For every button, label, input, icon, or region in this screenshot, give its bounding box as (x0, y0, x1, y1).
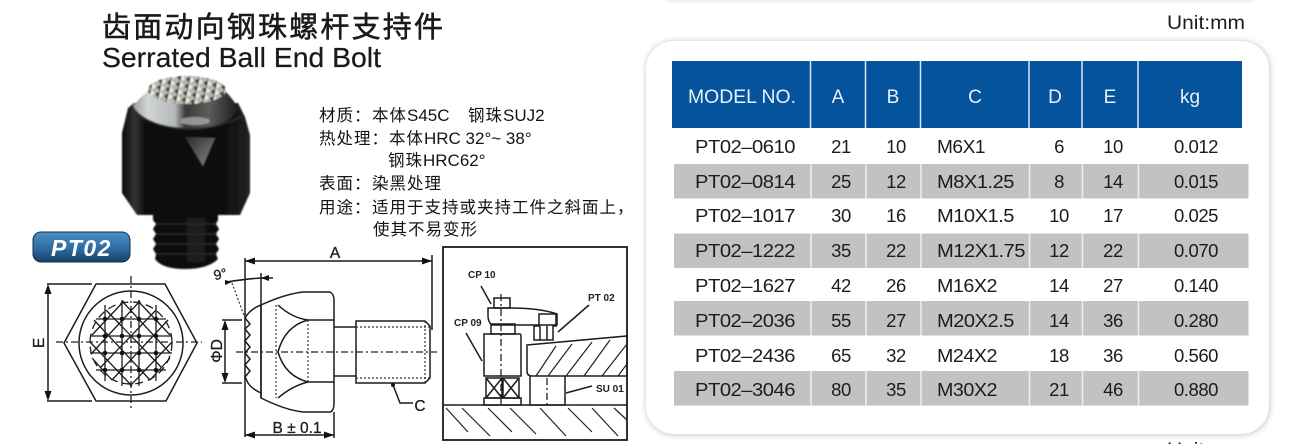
table row: PT02-1017: 30 (831, 205, 851, 226)
table row: PT02-2036: 0.280 (1174, 310, 1218, 331)
diagram: hexagon end view (31, 276, 202, 410)
table row: PT02-1222: M12X1.75 (937, 240, 1025, 261)
table row: PT02-3046: 46 (1103, 379, 1123, 400)
table row: PT02-1017: 10 (1049, 205, 1069, 226)
table row: PT02-1222: 35 (831, 240, 851, 261)
table row: PT02-2436: 32 (886, 345, 906, 366)
table row: PT02-0610: 6 (1054, 136, 1064, 157)
callout: CP 09 (454, 318, 482, 361)
table row: PT02-3046: PT02–3046 (695, 379, 795, 400)
table row: PT02-1627: 42 (831, 275, 851, 296)
text block: specifications: SUJ2 (503, 106, 545, 125)
text block: specifications: 表面： (319, 175, 372, 193)
table row: PT02-0814: 25 (831, 171, 851, 192)
text block: specifications (319, 106, 634, 239)
dimension: C (391, 383, 426, 415)
table row: PT02-3046: M30X2 (937, 379, 997, 400)
dimension: phi D (209, 320, 242, 383)
table row: PT02-1627: 0.140 (1174, 275, 1218, 296)
text block: specifications: 钢珠HRC62° (388, 151, 486, 170)
text block: specifications: 材质： (319, 107, 372, 125)
table row: PT02-0610: M6X1 (937, 136, 985, 157)
previous panel edge at top (660, 0, 1260, 1)
badge: PT02: PT02 (51, 235, 112, 261)
table row: PT02-2036: 55 (831, 310, 851, 331)
callout: SU 01 (566, 384, 624, 395)
table row: PT02-3046: 21 (1049, 379, 1069, 400)
table header: B (887, 87, 899, 108)
dimension: B: B ± 0.1 (272, 420, 322, 437)
table row: PT02-3046 (695, 379, 1218, 400)
table row: PT02-1017: M10X1.5 (937, 205, 1014, 226)
callout: SU 01: SU 01 (596, 384, 624, 395)
table row: PT02-2436: PT02–2436 (695, 345, 795, 366)
table row: PT02-0610: PT02–0610 (695, 136, 795, 157)
table row: PT02-0814: M8X1.25 (937, 171, 1014, 192)
table row: PT02-1627: PT02–1627 (695, 275, 795, 296)
callout: PT 02 (558, 293, 615, 332)
table row: PT02-1222: 22 (1103, 240, 1123, 261)
text block: specifications: 本体 (389, 129, 424, 148)
table row: PT02-1222: 22 (886, 240, 906, 261)
table row: PT02-1627: 27 (1103, 275, 1123, 296)
table row: PT02-0814: PT02–0814 (695, 171, 795, 192)
table row: PT02-1627: 14 (1049, 275, 1069, 296)
table row: PT02-0610: 21 (831, 136, 851, 157)
table row: PT02-1222 (695, 240, 1218, 261)
table row: PT02-0610: 0.012 (1174, 136, 1218, 157)
label: E: E (31, 338, 48, 348)
dimension: A: A (330, 245, 341, 262)
table row: PT02-0610 (695, 136, 1218, 157)
table row: PT02-2036: 27 (886, 310, 906, 331)
dimension: phi D: ΦD (209, 339, 226, 363)
table row: PT02-2436: 65 (831, 345, 851, 366)
table row: PT02-0610: 10 (1103, 136, 1123, 157)
icon: serrated grid (90, 300, 172, 386)
table row: PT02-2036: M20X2.5 (937, 310, 1014, 331)
table row: PT02-3046: 0.880 (1174, 379, 1218, 400)
callout: CP 10: CP 10 (468, 270, 496, 281)
table row: PT02-1222: PT02–1222 (695, 240, 795, 261)
table row: PT02-0814: 12 (886, 171, 906, 192)
table row: PT02-0814: 14 (1103, 171, 1123, 192)
table header (672, 61, 1242, 128)
icon: product photo of bolt (122, 76, 250, 269)
table header: MODEL NO. (688, 87, 796, 108)
title: English: Serrated Ball End Bolt (102, 42, 381, 73)
table row: PT02-1017 (695, 205, 1218, 226)
table row: PT02-2436: 36 (1103, 345, 1123, 366)
text block: specifications: 用途： (319, 199, 372, 217)
table row: PT02-2036 (695, 310, 1218, 331)
table row: PT02-2036: 36 (1103, 310, 1123, 331)
callout: CP 10 (468, 270, 496, 304)
table row: PT02-3046: 80 (831, 379, 851, 400)
table row: PT02-1017: 17 (1103, 205, 1123, 226)
table row: PT02-2436: 0.560 (1174, 345, 1218, 366)
table header: A (832, 87, 845, 108)
badge: PT02 (33, 232, 130, 262)
text block: specifications: 钢珠 (468, 106, 503, 125)
dimension: B (245, 412, 334, 438)
table row: PT02-2036: PT02–2036 (695, 310, 795, 331)
dimension: 9 degrees: 9° (212, 265, 228, 283)
text block: specifications: 适用于支持或夹持工件之斜面上， (372, 198, 634, 217)
table row: PT02-1627: M16X2 (937, 275, 997, 296)
text block: specifications: 染黑处理 (372, 174, 442, 193)
table row: PT02-3046: 35 (886, 379, 906, 400)
callout: PT 02: PT 02 (588, 293, 615, 304)
title: Chinese: 齿面动向钢珠螺杆支持件 (102, 11, 445, 44)
table row: PT02-0814: 8 (1054, 171, 1064, 192)
label: unit top: Unit:mm (1167, 12, 1245, 34)
table header: C (968, 87, 982, 108)
dimension: A (245, 245, 432, 437)
table row: PT02-1222: 0.070 (1174, 240, 1218, 261)
table header: kg (1180, 87, 1200, 108)
table row stripes (674, 164, 1248, 406)
table row: PT02-0814 (695, 171, 1218, 192)
table row: PT02-1017: 16 (886, 205, 906, 226)
table row: PT02-2436: M24X2 (937, 345, 997, 366)
text block: specifications: S45C (407, 106, 450, 125)
text block: specifications: 热处理： (319, 130, 389, 148)
text block: specifications: 使其不易变形 (373, 220, 478, 239)
table header: D (1048, 87, 1062, 108)
panel: table card (646, 41, 1270, 435)
table row: PT02-1222: 12 (1049, 240, 1069, 261)
dimension: C: C (414, 398, 426, 415)
table row: PT02-1627 (695, 275, 1218, 296)
table row: PT02-2436 (695, 345, 1218, 366)
table header: E (1104, 87, 1116, 108)
table row: PT02-0814: 0.015 (1174, 171, 1218, 192)
dimension: 9 degrees (212, 265, 273, 318)
text block: specifications: 本体 (372, 106, 407, 125)
table row: PT02-2036: 14 (1049, 310, 1069, 331)
table row: PT02-1627: 26 (886, 275, 906, 296)
diagram: assembly box (443, 247, 627, 440)
text block: specifications: HRC 32°~ 38° (424, 129, 532, 148)
callout: CP 09: CP 09 (454, 318, 482, 329)
diagram: side view (209, 245, 437, 438)
table row: PT02-1017: PT02–1017 (695, 205, 795, 226)
table row: PT02-2436: 18 (1049, 345, 1069, 366)
table row: PT02-1017: 0.025 (1174, 205, 1218, 226)
table row: PT02-0610: 10 (886, 136, 906, 157)
